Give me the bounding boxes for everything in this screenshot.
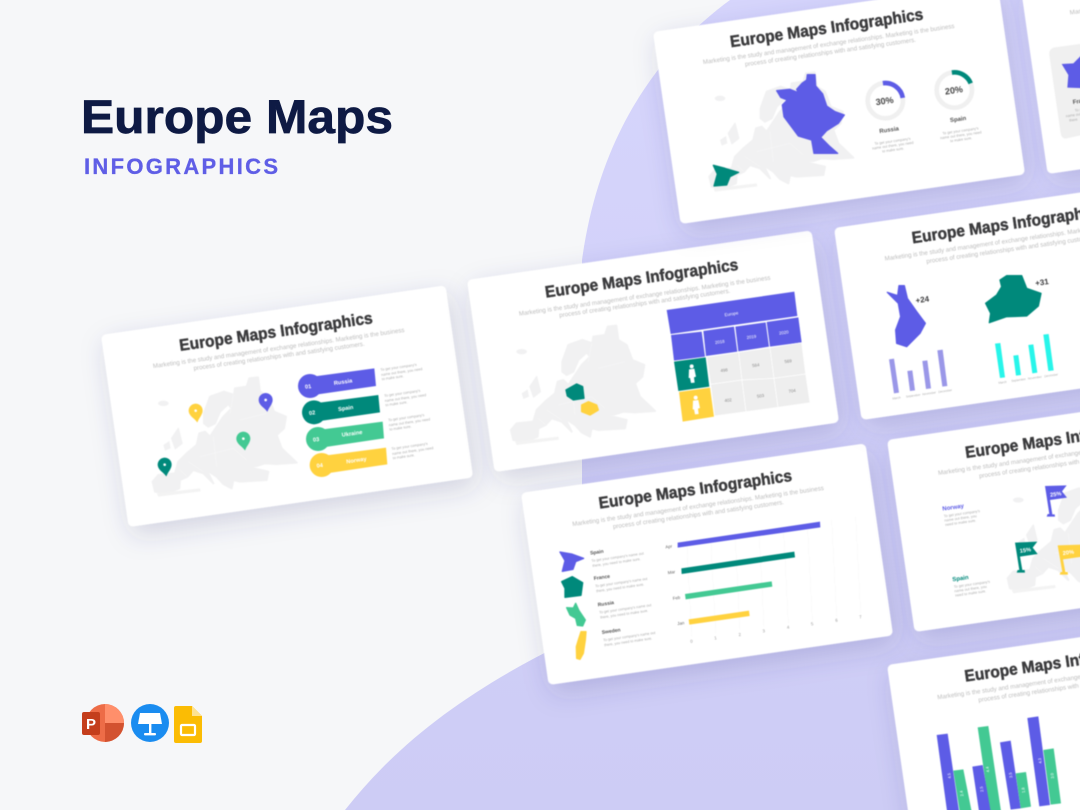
- pin: yellow: [188, 403, 204, 424]
- bar chart: Belarus: September: [1011, 377, 1026, 383]
- caption: Spain: name out there, you need: [940, 130, 982, 140]
- column chart: 4.3: [1037, 757, 1043, 764]
- legend: France: there, you need to make sure.: [596, 582, 645, 593]
- column chart: [937, 716, 1061, 810]
- label bar: Russia: 01: [305, 384, 312, 391]
- card heading: Europe Maps Infographics: [178, 309, 374, 355]
- callout: Spain: name out there, you: [954, 585, 987, 593]
- column chart: 3.0: [1049, 772, 1055, 779]
- legend: Spain: Spain: [590, 549, 604, 557]
- bar chart: Feb: [672, 595, 681, 601]
- subtitle: INFOGRAPHICS: [84, 154, 278, 179]
- card description: process of creating relationships with and satisfying customers.: [613, 499, 785, 531]
- caption: Spain: To get your company's: [942, 126, 979, 136]
- country: France: [562, 577, 583, 597]
- label bar: Russia: [298, 368, 376, 398]
- callout: Spain: Spain: [952, 575, 969, 583]
- column chart: 2.5: [979, 785, 984, 792]
- country: Finland: [887, 286, 925, 347]
- donut chart: Russia 30%: 30%: [875, 95, 894, 107]
- column chart: 4.5: [946, 772, 952, 779]
- bar chart: 4: [787, 624, 790, 630]
- slide card: horizontal bar chart: [521, 443, 893, 685]
- side notes: to make sure.: [382, 374, 404, 381]
- slide card: map with donut charts: [653, 0, 1025, 224]
- caption: Russia: to make sure.: [882, 146, 904, 154]
- caption: Russia: To get your company's: [874, 137, 911, 146]
- bar chart: 6: [835, 617, 839, 623]
- column chart: 1.8: [1020, 786, 1026, 793]
- bar chart: Apr: [665, 543, 673, 549]
- card description: Marketing is the study and management of exchange relationships. Marketing is the business: [572, 485, 824, 528]
- bar chart: Finland: March: [892, 395, 901, 401]
- icon: Google Slides: [174, 706, 202, 743]
- bar chart: 5: [811, 621, 814, 626]
- side notes: To get your company's: [384, 389, 421, 398]
- side notes: To get your company's: [380, 363, 417, 372]
- icon: Keynote: [131, 704, 169, 742]
- callout: Norway: Norway: [942, 504, 965, 513]
- caption: Russia: [872, 126, 914, 154]
- callout: Spain: To get your company's: [954, 580, 990, 589]
- background purple shape: [345, 0, 1080, 810]
- country: Russia: [777, 75, 844, 153]
- country: Poland: [566, 384, 584, 400]
- legend: France: France: [593, 574, 611, 582]
- caption: Russia: name out there, you need: [872, 141, 914, 151]
- description: [1066, 107, 1080, 123]
- bar chart: 2: [738, 632, 742, 637]
- data table: 2019: [746, 334, 757, 340]
- label bar: Spain: Spain: [338, 405, 354, 413]
- callout: Norway: need to make sure.: [945, 519, 976, 527]
- slide card: Finland and Belarus: [834, 178, 1080, 420]
- main title: Europe Maps: [81, 90, 393, 143]
- flag: 20%: [1058, 545, 1080, 575]
- card description: Marketing is the study and management of exchange relationships. Marketing is the business: [703, 23, 955, 66]
- legend: France: To get your company's name out: [595, 577, 648, 588]
- slide card: grouped column chart: [887, 615, 1080, 810]
- column chart: 3.5: [1008, 771, 1013, 778]
- bar chart: Belarus: December: [1044, 372, 1058, 378]
- data table: 498: [720, 367, 729, 373]
- legend: Spain: there, you need to make sure.: [592, 557, 641, 568]
- bar chart: Belarus: [995, 334, 1058, 385]
- pin: green: [235, 431, 252, 452]
- slide card: map with location pins: [101, 285, 473, 527]
- label bar: Norway: 04: [316, 463, 324, 470]
- description: there: [1069, 118, 1078, 123]
- column chart: 4.4: [985, 766, 990, 773]
- pin: teal: [157, 457, 173, 478]
- callout: Spain: need to make sure.: [955, 589, 986, 598]
- label bar: Ukraine: 03: [313, 437, 320, 444]
- side notes: To get your company's: [388, 413, 425, 422]
- flag: 15%: [1015, 542, 1038, 573]
- card description: Marketing is the study and management of exchange relationships. Marketing is the business: [153, 327, 405, 370]
- data table: 704: [788, 388, 797, 394]
- legend: Spain: To get your company's name out: [591, 552, 644, 563]
- label bar: Spain: 02: [309, 410, 316, 417]
- data table: 584: [752, 362, 760, 368]
- side notes: [380, 363, 434, 460]
- slide card: France panel (cropped): [1020, 0, 1080, 174]
- side notes: to make sure.: [385, 400, 408, 407]
- bar chart: 1: [714, 635, 718, 640]
- value: +24: +24: [915, 294, 930, 305]
- bar chart: 3: [762, 628, 766, 633]
- side notes: name out there, you need: [381, 367, 423, 377]
- legend: Sweden: there, you need to make sure.: [604, 636, 653, 647]
- flag: 15%: 15%: [1019, 547, 1032, 555]
- card description: Marketing is the study and management of exchange relationships. Marketing is the business: [519, 275, 771, 318]
- legend: Sweden: [601, 627, 656, 647]
- bar chart: Jan: [677, 620, 685, 626]
- icon: PowerPoint: [82, 704, 124, 742]
- country: Spain: [560, 552, 584, 571]
- callout: Norway: name out there, you: [944, 514, 977, 523]
- flag: 20%: 20%: [1062, 550, 1075, 557]
- slide card: map with data table: [467, 230, 839, 472]
- column chart: 2.4: [959, 790, 964, 797]
- legend: Sweden: To get your company's name out: [603, 631, 656, 642]
- donut chart: Spain 20%: 20%: [944, 84, 964, 97]
- country: Russia: [567, 603, 585, 626]
- legend: Russia: [597, 600, 652, 620]
- donut chart: Russia 30%: [865, 81, 905, 121]
- grey country panel: [1049, 40, 1080, 138]
- europe map: [709, 72, 853, 192]
- side notes: to make sure.: [393, 453, 415, 460]
- legend: Russia: To get your company's name out: [599, 603, 652, 615]
- callout: Norway: To get your company's: [944, 509, 980, 518]
- card description: process of creating relationships with and satisfying customers.: [745, 37, 917, 68]
- value: +31: +31: [1035, 277, 1050, 288]
- side notes: to make sure.: [389, 425, 412, 432]
- label bar: Ukraine: [306, 422, 384, 451]
- label bar: Spain: [302, 395, 380, 424]
- country: France: [1062, 55, 1080, 88]
- card heading: Europe Maps Infographics: [597, 467, 793, 513]
- side notes: name out there, you need: [385, 393, 426, 403]
- country: Spain: [713, 165, 739, 186]
- data table: [667, 292, 810, 422]
- bar chart: 7: [859, 614, 863, 619]
- callout: Norway: [942, 504, 980, 527]
- bar chart: Belarus: March: [998, 380, 1007, 385]
- callout: Spain: [952, 575, 990, 598]
- bar chart: Finland: [889, 350, 952, 401]
- europe map: [153, 377, 297, 497]
- card description: process of creating relationships with and satisfying customers.: [193, 341, 365, 372]
- legend: Spain: [590, 549, 644, 568]
- label bar: Norway: Norway: [346, 456, 368, 465]
- side notes: name out there, you need: [389, 417, 430, 427]
- bar chart: Mar: [667, 569, 676, 575]
- legend: Russia: Russia: [597, 600, 615, 608]
- bar chart: 0: [690, 638, 694, 644]
- card heading: Europe Maps Infographics: [729, 6, 924, 51]
- bar chart: Belarus: November: [1028, 375, 1042, 381]
- caption: Spain: [940, 116, 982, 143]
- legend: France: [593, 574, 648, 593]
- pin: purple: [258, 392, 274, 413]
- country: Belarus: [986, 276, 1041, 323]
- data table: 2020: [779, 329, 789, 336]
- side notes: name out there, you need: [392, 446, 434, 456]
- slide card: map with flags: [887, 390, 1080, 632]
- flag: 25%: 25%: [1050, 491, 1062, 499]
- label bar: Norway: [310, 448, 387, 477]
- caption: Russia: Russia: [879, 126, 900, 135]
- bar chart: Finland: December: [938, 388, 952, 394]
- card description: process of creating relationships with and satisfying customers.: [559, 288, 731, 319]
- data table: 503: [757, 393, 765, 399]
- label bar: Russia: Russia: [334, 378, 354, 387]
- caption: Spain: to make sure.: [950, 136, 972, 143]
- bar chart: Finland: November: [922, 390, 936, 396]
- caption: Spain: Spain: [950, 116, 967, 124]
- donut chart: Spain 20%: [934, 70, 974, 110]
- legend: Russia: there, you need to make sure.: [600, 609, 649, 620]
- europe map: [1008, 474, 1080, 593]
- data table: 569: [784, 358, 793, 364]
- label bar: Ukraine: Ukraine: [341, 430, 363, 439]
- europe map: [511, 326, 655, 445]
- bar chart: [665, 517, 863, 644]
- card heading: Europe Maps Infographics: [544, 256, 739, 302]
- data table: 2018: [715, 339, 725, 345]
- data table: Europe: [724, 310, 739, 317]
- country: Sweden: [576, 632, 586, 659]
- legend: Sweden: Sweden: [601, 627, 621, 636]
- flag: 25%: [1045, 485, 1067, 517]
- icon: PowerPoint: P: [86, 716, 96, 733]
- country: Romania: [582, 402, 598, 415]
- bar chart: Finland: September: [906, 393, 921, 399]
- data table: 402: [724, 397, 733, 403]
- side notes: To get your company's: [391, 442, 428, 451]
